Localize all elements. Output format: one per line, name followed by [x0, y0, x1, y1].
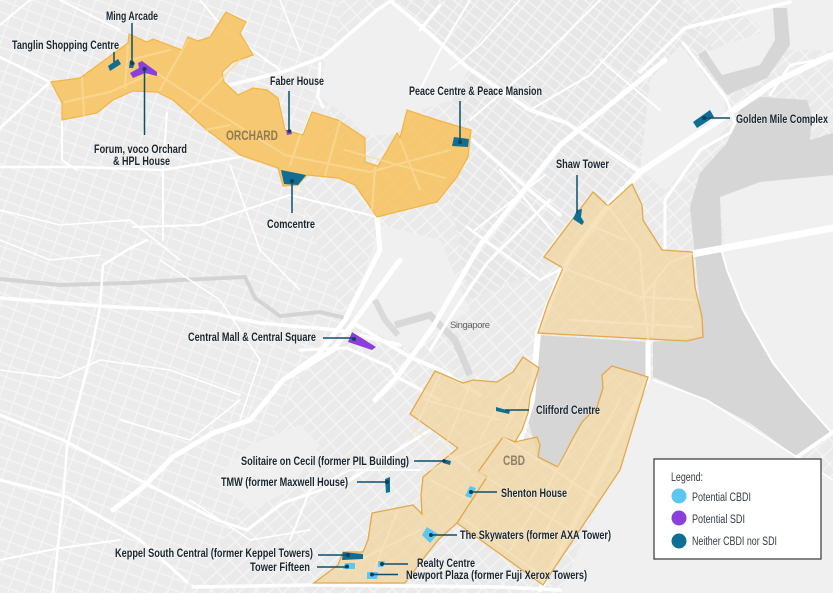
streets inside the zones: [65, 40, 694, 580]
callout: Golden Mile Complex: [693, 110, 828, 128]
callout: Realty Centre: Realty Centre: [417, 558, 475, 570]
callout: The Skywaters: The Skywaters (former AXA Tower): [460, 530, 611, 542]
callout: Keppel South Central: Keppel South Central (former Keppel Towers): [115, 548, 313, 560]
callout: Tower Fifteen: Tower Fifteen: [250, 562, 310, 574]
legend item: Neither CBDI nor SDI: Neither CBDI nor SDI: [692, 536, 777, 548]
callout: Tanglin Shopping Centre: Tanglin Shopping Centre: [12, 40, 119, 52]
callout: Ming Arcade: Ming Arcade: [106, 11, 158, 23]
callout: Realty Centre: [378, 558, 475, 570]
callout: Comcentre: [267, 170, 315, 231]
callout: Forum, voco Orchard and HPL House: & HPL House: [113, 156, 170, 168]
legend item: Potential CBDI: Potential CBDI: [692, 492, 751, 504]
callout: Clifford Centre: [496, 405, 600, 417]
callout: Central Mall and Central Square: [188, 332, 376, 350]
callout: Shenton House: Shenton House: [501, 488, 567, 500]
callout: Clifford Centre: Clifford Centre: [536, 405, 600, 417]
legend item: Potential SDI: Potential SDI: [692, 514, 745, 526]
area label: CBD: CBD: [503, 453, 525, 468]
callout: Peace Centre and Peace Mansion: [409, 86, 542, 147]
parks and open land: [215, 0, 833, 593]
callout: Faber House: [270, 76, 324, 135]
callout: Forum, voco Orchard and HPL House: [94, 61, 187, 168]
callout: Newport Plaza: Newport Plaza (former Fuji Xerox Towers): [406, 570, 587, 582]
callout: Forum, voco Orchard and HPL House: Forum, voco Orchard: [94, 144, 187, 156]
callout: Central Mall and Central Square: Central Mall & Central Square: [188, 332, 316, 344]
callout: Ming Arcade: [106, 11, 158, 68]
legend: [654, 459, 821, 559]
callout: Peace Centre and Peace Mansion: Peace Centre & Peace Mansion: [409, 86, 542, 98]
place label: Singapore: Singapore: [450, 320, 490, 331]
planning zone: Marina Centre: [538, 184, 703, 341]
area label: Orchard: ORCHARD: [226, 128, 278, 143]
callout: TMW: TMW (former Maxwell House): [221, 477, 348, 489]
callout: Solitaire on Cecil: Solitaire on Cecil (former PIL Building): [241, 456, 409, 468]
callout: Faber House: Faber House: [270, 76, 324, 88]
legend item: Neither CBDI nor SDI: [672, 534, 777, 548]
callout: Shenton House: [465, 486, 567, 500]
callout: Comcentre: Comcentre: [267, 219, 315, 231]
planning zone: CBD central and Tanjong Pagar: [314, 357, 539, 583]
callout: Newport Plaza: [367, 570, 587, 582]
legend item: Potential CBDI: [672, 488, 751, 504]
callout: The Skywaters: [422, 527, 611, 543]
water: [0, 8, 833, 467]
legend item: Potential SDI: [672, 510, 745, 526]
callout: Shaw Tower: Shaw Tower: [556, 159, 609, 171]
planning zone: Orchard: [51, 12, 471, 217]
callout: Tanglin Shopping Centre: [12, 40, 121, 71]
callout: Shaw Tower: [556, 159, 609, 225]
legend: Legend:: [671, 472, 703, 484]
planning zone: Marina Bay: [457, 366, 648, 585]
